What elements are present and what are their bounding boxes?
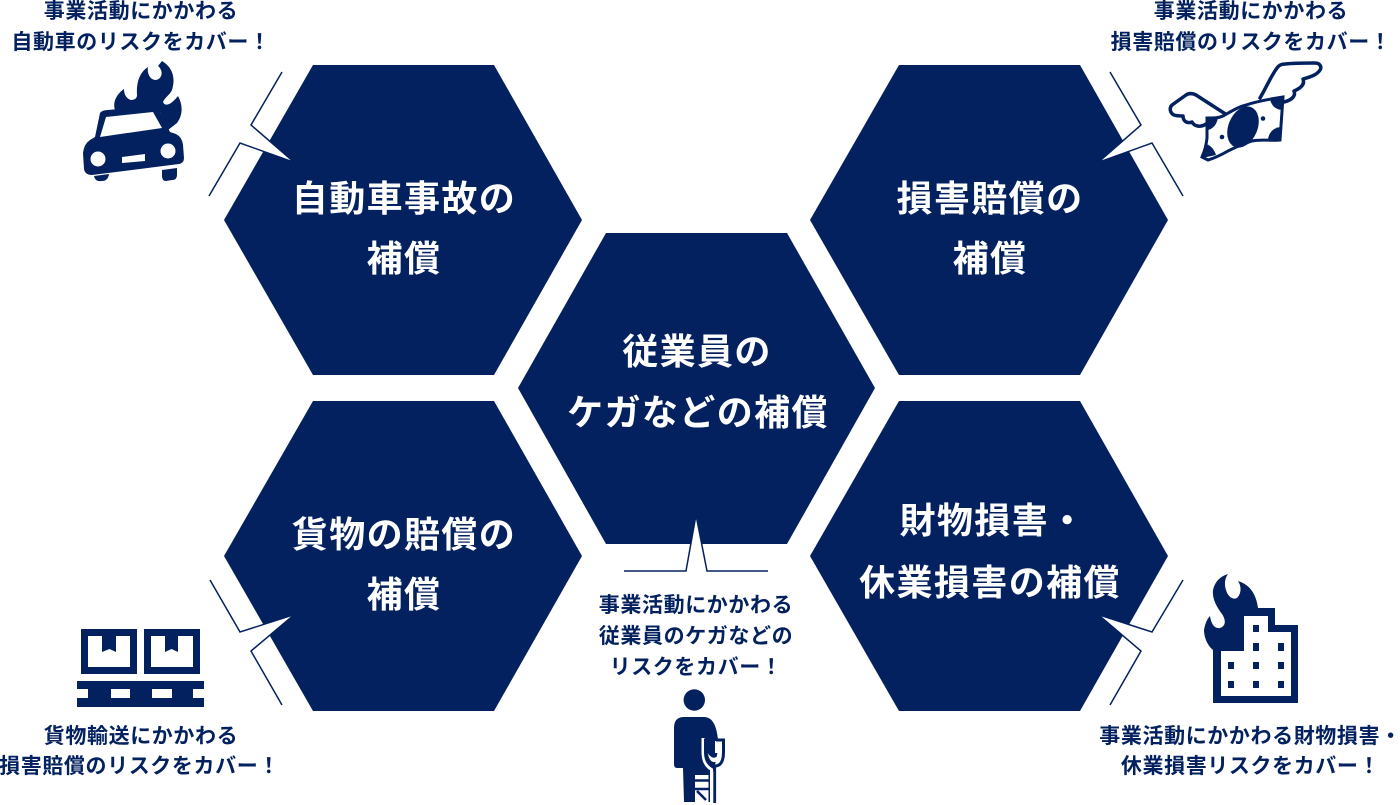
hexagon: property and business interruption: 財物損害・ <box>899 500 1087 541</box>
caption: top left: 自動車のリスクをカバー！ <box>11 31 271 54</box>
icon: flying money <box>1170 63 1321 160</box>
caption: center <box>599 593 793 679</box>
hexagon: damages compensation: 損害賠償の <box>896 178 1084 219</box>
hexagon: automobile accident: 補償 <box>367 238 441 279</box>
caption: bottom right <box>1099 724 1400 778</box>
hexagon: employee injury: ケガなどの補償 <box>567 392 829 433</box>
callout pointer: center <box>624 515 768 571</box>
hexagon: employee injury <box>518 233 875 544</box>
icon: burning building <box>1204 574 1298 703</box>
hexagon: property and business interruption: 休業損害の補償 <box>859 562 1121 603</box>
caption: top left: 事業活動にかかわる <box>44 0 238 23</box>
hexagon: property and business interruption <box>810 401 1168 711</box>
caption: bottom right: 休業損害リスクをカバー！ <box>1121 755 1380 778</box>
hexagon: cargo compensation <box>224 401 582 711</box>
hexagon: automobile accident <box>224 65 582 375</box>
caption: top right: 事業活動にかかわる <box>1154 0 1348 23</box>
callout pointer: top left <box>209 72 294 196</box>
caption: top right <box>1111 0 1391 54</box>
hexagon: automobile accident: 自動車事故の <box>292 178 516 219</box>
hexagon: employee injury: 従業員の <box>622 331 772 372</box>
caption: center: リスクをカバー！ <box>610 656 782 679</box>
icon: person with crutch <box>674 689 724 803</box>
callout pointer: bottom right <box>1098 580 1183 705</box>
caption: center: 事業活動にかかわる <box>599 593 793 617</box>
icon: pallet with boxes <box>77 629 204 707</box>
caption: bottom left <box>0 724 280 778</box>
hexagon: cargo compensation: 補償 <box>367 574 441 615</box>
callout pointer: bottom left <box>210 580 294 705</box>
caption: top right: 損害賠償のリスクをカバー！ <box>1111 31 1391 54</box>
callout pointer: top right <box>1098 72 1183 196</box>
caption: bottom right: 事業活動にかかわる財物損害・ <box>1099 724 1400 748</box>
caption: top left <box>11 0 271 54</box>
hexagon: damages compensation: 補償 <box>953 238 1027 279</box>
caption: center: 従業員のケガなどの <box>599 625 793 648</box>
hexagon: damages compensation <box>810 65 1168 375</box>
icon: burning car <box>83 61 184 181</box>
hexagon: cargo compensation: 貨物の賠償の <box>292 514 516 555</box>
caption: bottom left: 貨物輸送にかかわる <box>44 724 238 748</box>
caption: bottom left: 損害賠償のリスクをカバー！ <box>0 755 280 778</box>
